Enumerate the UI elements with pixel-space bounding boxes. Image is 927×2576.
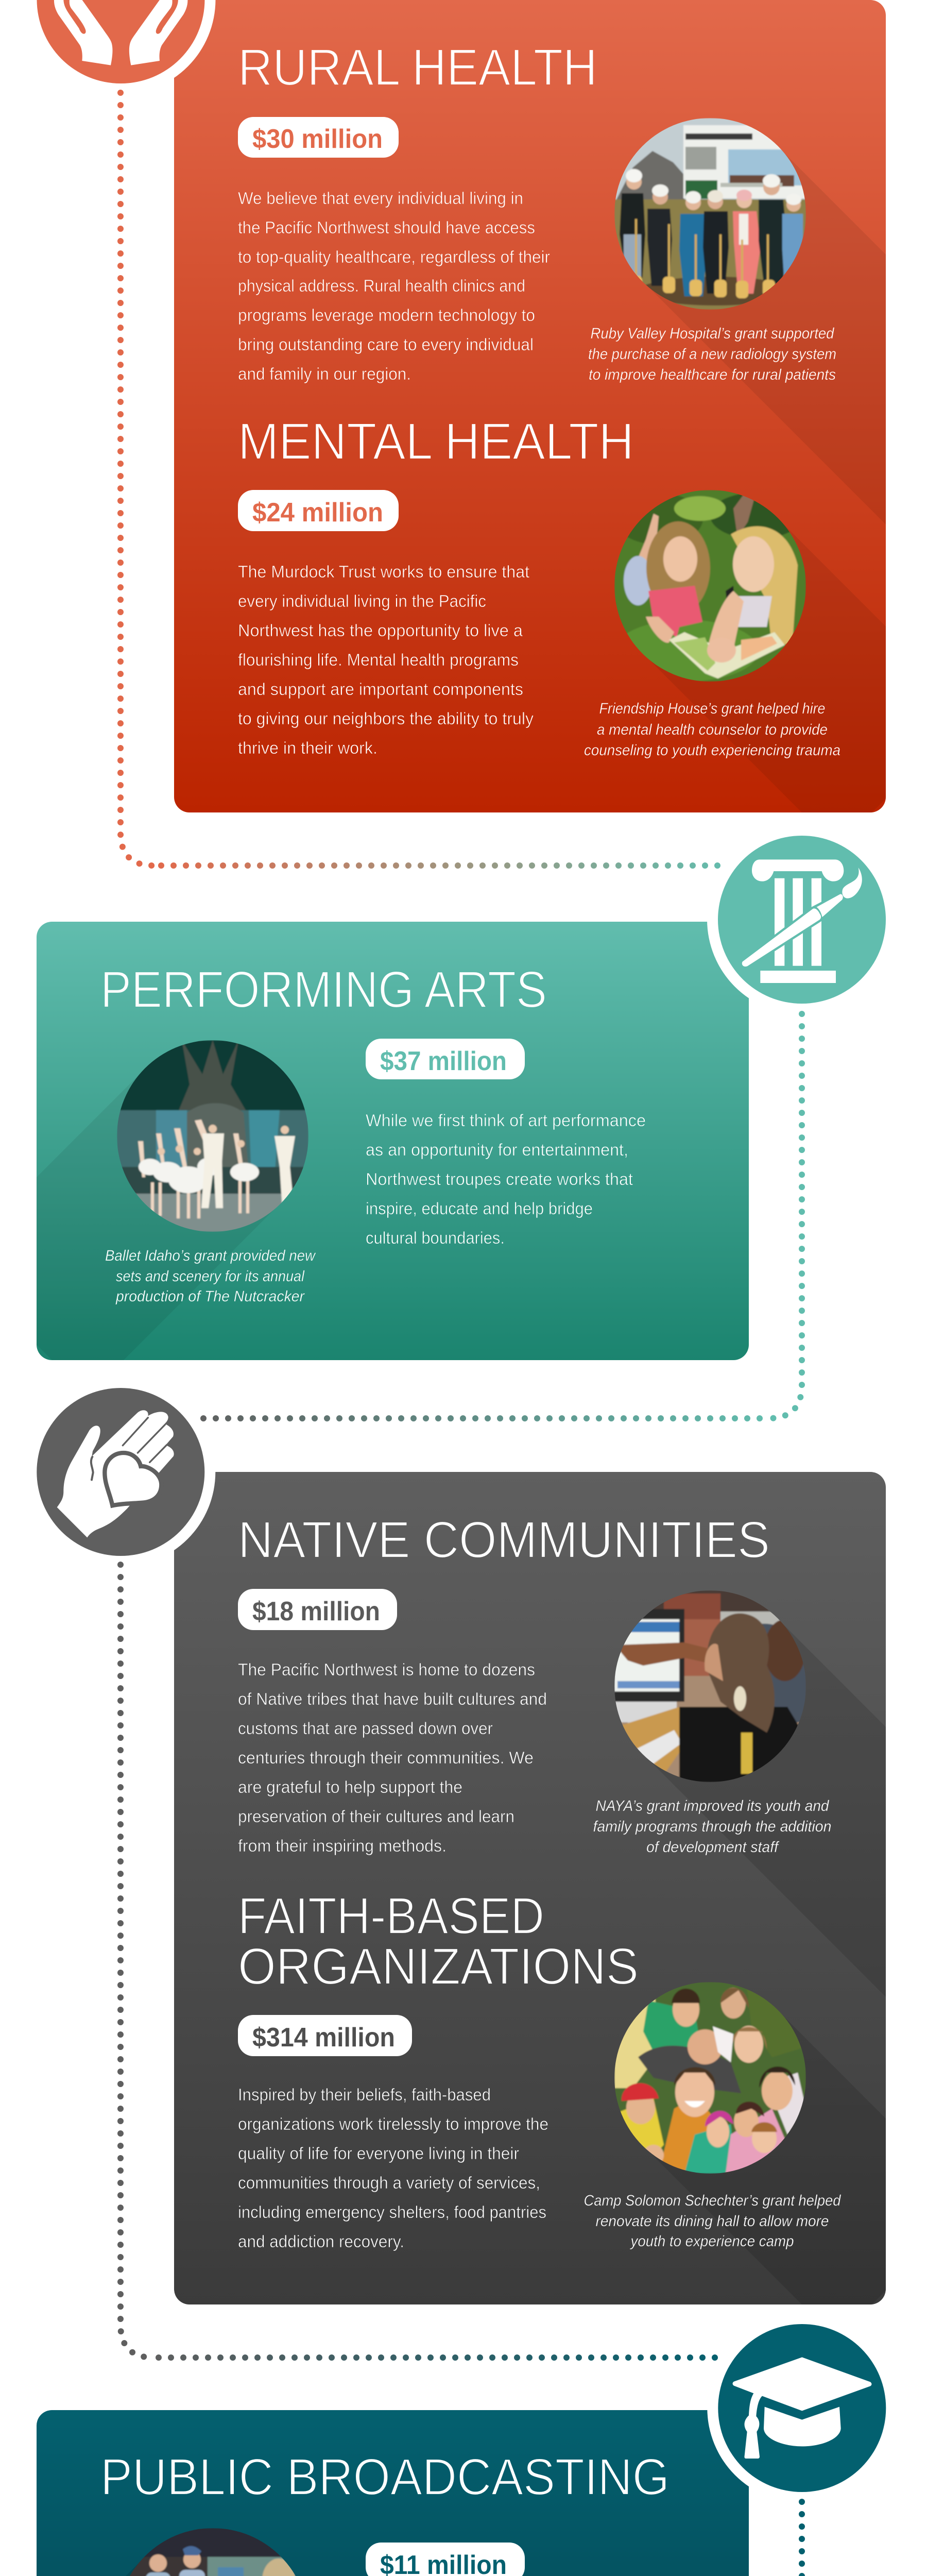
body text: mental health: every individual living in the Pacific	[238, 591, 486, 611]
photo: Ruby Valley Hospital groundbreaking	[614, 118, 806, 310]
body text: rural health: and family in our region.	[238, 364, 411, 383]
icon backing ring: column	[707, 825, 897, 1014]
body text: rural health: We believe that every individual living in	[238, 189, 523, 208]
caption: Camp Solomon Schechter: renovate its dining hall to allow more	[595, 2213, 829, 2230]
caption: Ballet Idaho	[105, 1247, 316, 1305]
pill: $30 million	[238, 117, 399, 158]
panel: rural and mental health	[174, 0, 886, 812]
caption: NAYA: NAYA’s grant improved its youth and	[595, 1798, 830, 1815]
body text: faith-based organizations: including emergency shelters, food pantries	[238, 2202, 546, 2222]
icon: column and paintbrush	[718, 836, 886, 1004]
body text: native communities	[238, 1660, 547, 1855]
caption: NAYA: family programs through the addition	[593, 1818, 831, 1835]
body text: faith-based organizations	[238, 2085, 548, 2251]
body text: performing arts: While we first think of art performance	[366, 1111, 646, 1130]
pill: $18 million: $18 million	[252, 1597, 380, 1626]
caption: Friendship House: a mental health counselor to provide	[597, 721, 828, 738]
pill: $24 million	[238, 490, 399, 531]
body text: native communities: preservation of their cultures and learn	[238, 1807, 514, 1826]
icon backing ring: graduation cap	[707, 2313, 897, 2503]
body text: mental health	[238, 562, 534, 757]
pill: $11 million	[366, 2543, 525, 2576]
heading: performing arts: PERFORMING ARTS	[100, 961, 547, 1019]
caption: Friendship House	[584, 700, 840, 759]
body text: mental health: flourishing life. Mental health programs	[238, 650, 519, 669]
heading: faith-based organizations	[238, 1887, 639, 1995]
heading: public broadcasting: PUBLIC BROADCASTING	[100, 2448, 670, 2506]
connector: teal dotted path to gray	[191, 1014, 802, 1418]
long shadow	[37, 2556, 280, 2576]
body text: faith-based organizations: and addiction recovery.	[238, 2232, 404, 2251]
body text: faith-based organizations: organizations work tirelessly to improve the	[238, 2114, 548, 2133]
panel: native communities and faith-based organizations	[174, 1472, 886, 2304]
pill: $37 million: $37 million	[380, 1046, 507, 1076]
pill: $30 million: $30 million	[252, 124, 383, 154]
photo: KEXP live broadcast	[130, 2528, 296, 2576]
body text: performing arts	[366, 1111, 646, 1247]
long shadows	[643, 1619, 886, 2304]
body text: native communities: customs that are passed down over	[238, 1719, 493, 1738]
caption: Friendship House: counseling to youth experiencing trauma	[584, 742, 840, 759]
body text: faith-based organizations: quality of life for everyone living in their	[238, 2144, 519, 2163]
pill: $18 million	[238, 1589, 397, 1630]
heading: mental health: MENTAL HEALTH	[238, 413, 634, 470]
caption: Ruby Valley Hospital: Ruby Valley Hospital’s grant supported	[590, 325, 835, 342]
panel: public broadcasting	[37, 2410, 749, 2576]
photo: NAYA youth at computer	[614, 1590, 806, 1782]
caption: Camp Solomon Schechter	[584, 2192, 842, 2250]
caption: Ballet Idaho: production of The Nutcracker	[115, 1288, 305, 1305]
body text: native communities: The Pacific Northwest is home to dozens	[238, 1660, 535, 1679]
body text: rural health: bring outstanding care to every individual	[238, 335, 534, 354]
body text: rural health	[238, 189, 550, 383]
photo: Ballet Idaho Nutcracker	[117, 1040, 308, 1232]
connector: coral dotted path to teal	[121, 93, 730, 866]
pill: $314 million: $314 million	[252, 2023, 395, 2053]
caption: Camp Solomon Schechter: youth to experience camp	[630, 2233, 794, 2250]
caption: Camp Solomon Schechter: Camp Solomon Schechter’s grant helped	[584, 2192, 842, 2209]
caption: Ruby Valley Hospital: to improve healthcare for rural patients	[589, 366, 836, 383]
pill: $37 million	[366, 1039, 525, 1079]
connector: dark teal dotted path to gold	[188, 2502, 802, 2576]
panel: performing arts	[37, 922, 749, 1360]
caption: Ballet Idaho: Ballet Idaho’s grant provided new	[105, 1247, 316, 1264]
heading: native communities: NATIVE COMMUNITIES	[238, 1511, 770, 1569]
long shadow	[37, 1069, 280, 1360]
icon backing ring: hands	[26, 0, 215, 94]
body text: performing arts: cultural boundaries.	[366, 1228, 505, 1247]
body text: faith-based organizations: communities through a variety of services,	[238, 2173, 540, 2192]
body text: native communities: of Native tribes that have built cultures and	[238, 1689, 547, 1708]
pill: $314 million	[238, 2015, 412, 2056]
icon: open hands	[37, 0, 205, 83]
body text: performing arts: inspire, educate and help bridge	[366, 1199, 593, 1218]
connector: gray dotted path to dark teal	[121, 1565, 727, 2358]
heading: rural health: RURAL HEALTH	[238, 39, 597, 96]
body text: mental health: to giving our neighbors the ability to truly	[238, 709, 534, 728]
body text: native communities: are grateful to help support the	[238, 1777, 462, 1797]
body text: mental health: The Murdock Trust works to ensure that	[238, 562, 529, 581]
heading: faith-based organizations: FAITH-BASED	[238, 1887, 544, 1945]
body text: rural health: to top-quality healthcare, regardless of their	[238, 247, 550, 266]
body text: rural health: the Pacific Northwest should have access	[238, 218, 535, 237]
body text: mental health: and support are important components	[238, 680, 523, 699]
photo: Camp Solomon Schechter campers	[614, 1982, 806, 2174]
body text: faith-based organizations: Inspired by their beliefs, faith-based	[238, 2085, 491, 2104]
body text: mental health: Northwest has the opportunity to live a	[238, 621, 523, 640]
caption: Ruby Valley Hospital	[588, 325, 836, 383]
body text: rural health: physical address. Rural health clinics and	[238, 276, 525, 295]
photo: two girls reading on grass	[614, 490, 806, 682]
body text: native communities: from their inspiring methods.	[238, 1836, 447, 1855]
body text: native communities: centuries through their communities. We	[238, 1748, 534, 1767]
caption: NAYA: of development staff	[646, 1839, 780, 1856]
body text: performing arts: as an opportunity for entertainment,	[366, 1140, 628, 1159]
icon: graduation cap	[718, 2324, 886, 2492]
body text: mental health: thrive in their work.	[238, 738, 377, 757]
body text: performing arts: Northwest troupes create works that	[366, 1170, 633, 1189]
heading: faith-based organizations: ORGANIZATIONS	[238, 1938, 639, 1995]
icon: hand holding heart	[37, 1388, 204, 1556]
caption: NAYA	[593, 1798, 831, 1856]
long shadows	[643, 146, 886, 812]
body text: rural health: programs leverage modern technology to	[238, 306, 535, 325]
caption: Ballet Idaho: sets and scenery for its annual	[116, 1268, 305, 1285]
icon backing ring: hand and heart	[26, 1377, 215, 1567]
caption: Ruby Valley Hospital: the purchase of a new radiology system	[588, 346, 836, 363]
pill: $24 million: $24 million	[252, 498, 383, 528]
caption: Friendship House: Friendship House’s grant helped hire	[599, 700, 825, 717]
